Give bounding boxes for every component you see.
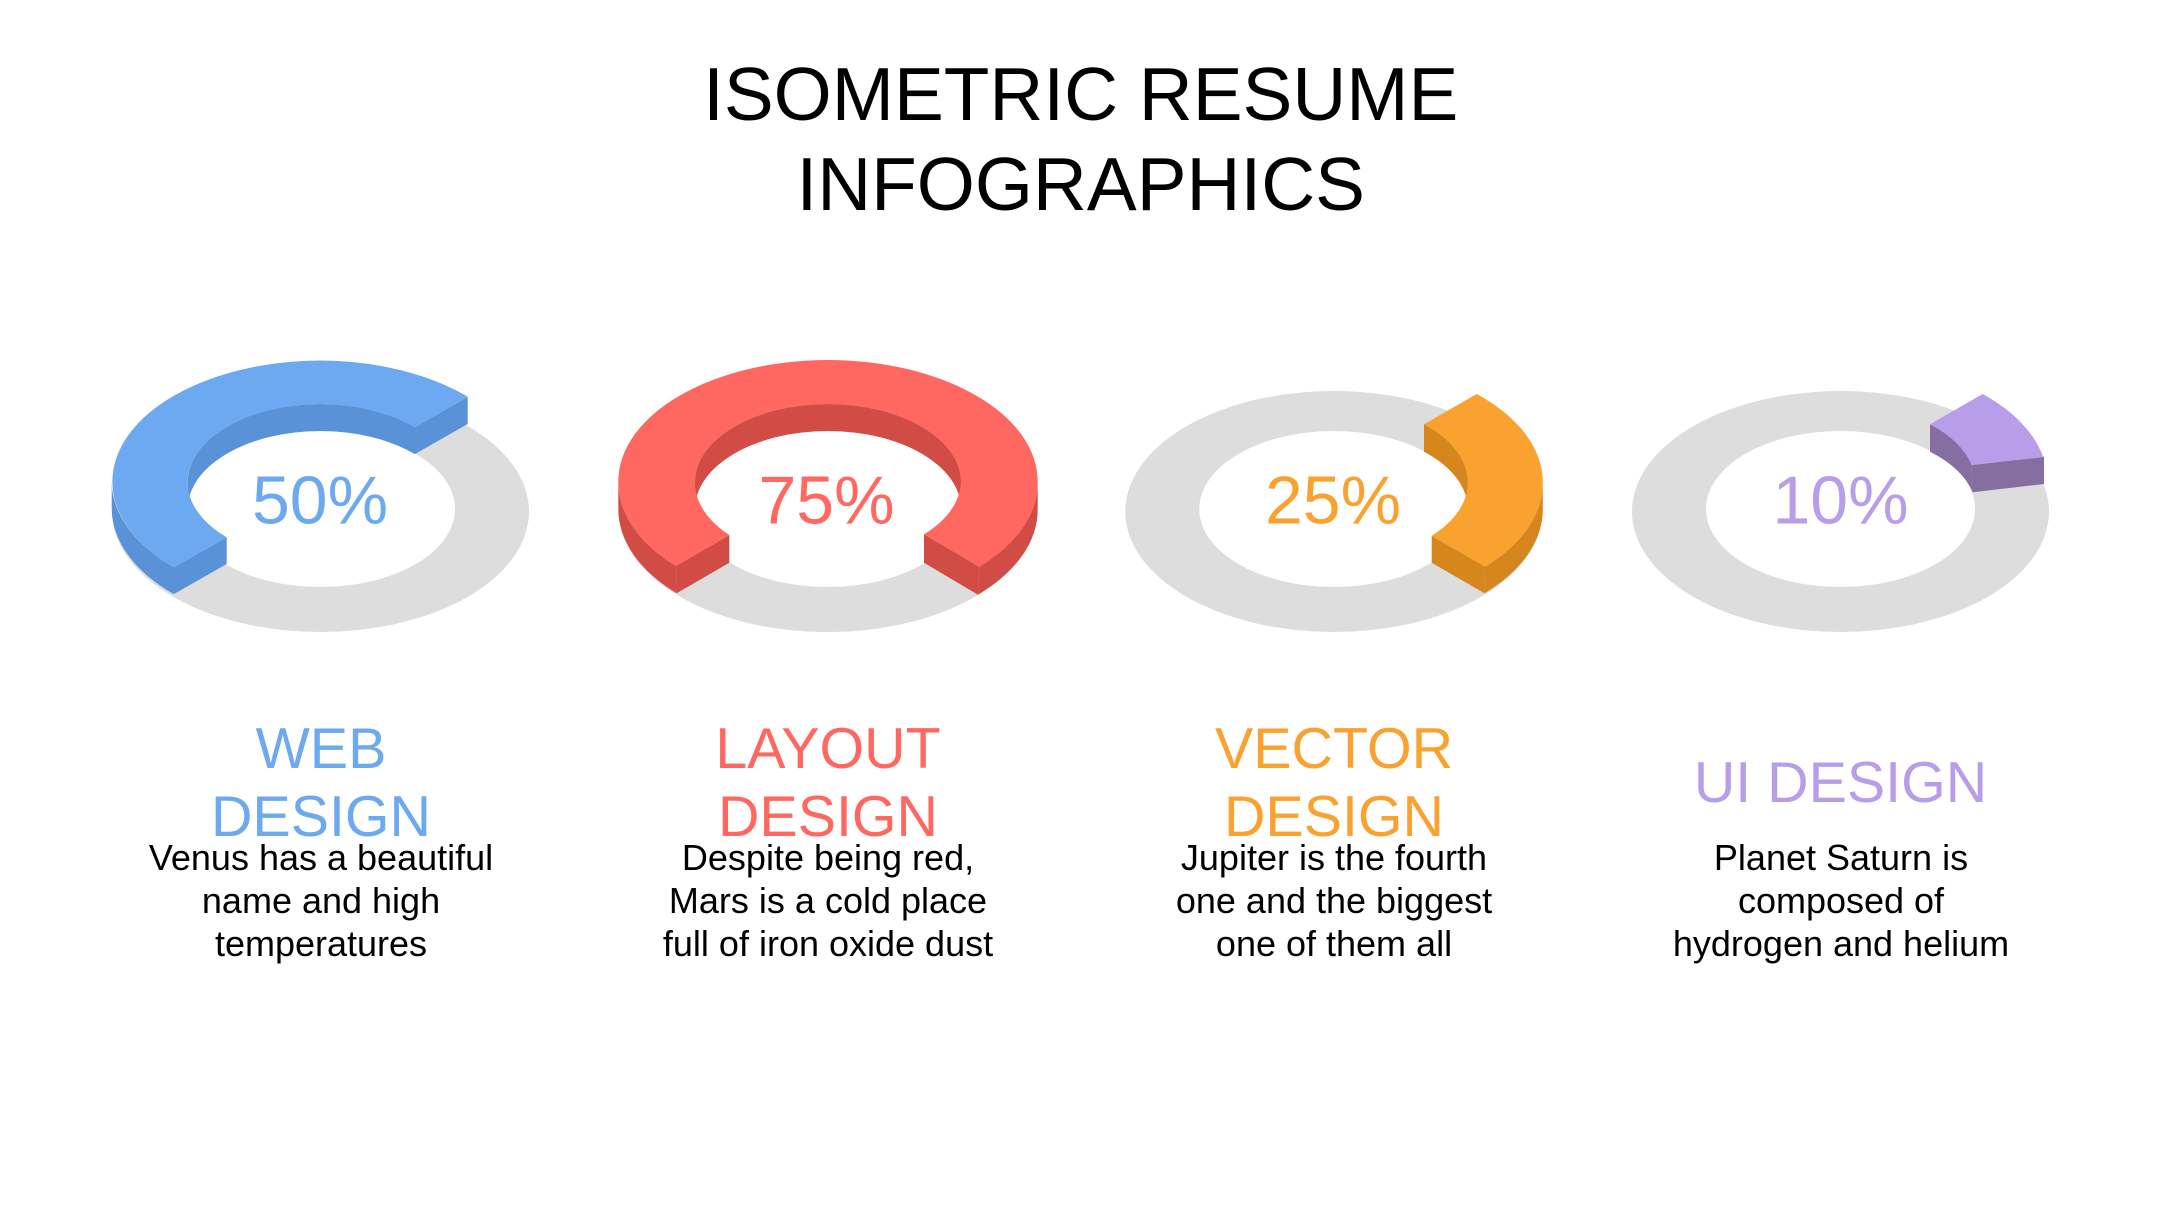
description: web design: Venus has a beautiful (149, 837, 493, 878)
description: layout design: Despite being red, (682, 837, 974, 878)
percentage: 50%: 50% (252, 462, 388, 538)
description: vector design: one of them all (1216, 923, 1452, 964)
description: ui design (1673, 837, 2009, 964)
description: vector design (1176, 837, 1492, 964)
percentage: 75%: 75% (758, 462, 895, 538)
label: layout design (715, 717, 941, 849)
label: ui design: UI DESIGN (1694, 751, 1987, 815)
donut chart: 25% (1125, 391, 1543, 632)
label: layout design: DESIGN (718, 785, 938, 849)
panel: web design (112, 360, 529, 964)
label: web design: WEB (256, 717, 386, 781)
description: vector design: Jupiter is the fourth (1181, 837, 1487, 878)
title (703, 52, 1458, 226)
description: vector design: one and the biggest (1176, 880, 1492, 921)
percentage: 10%: 10% (1772, 462, 1909, 538)
description: layout design (663, 837, 993, 964)
description: ui design: hydrogen and helium (1673, 923, 2009, 964)
label: web design: DESIGN (211, 785, 431, 849)
description: web design: name and high (202, 880, 440, 921)
panel: ui design (1632, 391, 2049, 964)
title: INFOGRAPHICS (796, 142, 1365, 226)
donut chart: 50% (112, 360, 529, 632)
label: layout design: LAYOUT (715, 717, 941, 781)
label: web design (211, 717, 431, 849)
panel: vector design (1125, 391, 1543, 964)
label: vector design: DESIGN (1224, 785, 1444, 849)
description: layout design: Mars is a cold place (669, 880, 987, 921)
donut chart: 10% (1632, 391, 2049, 632)
label: vector design (1215, 717, 1453, 849)
percentage: 25%: 25% (1265, 462, 1401, 538)
description: ui design: Planet Saturn is (1714, 837, 1968, 878)
title: ISOMETRIC RESUME (703, 52, 1458, 136)
description: layout design: full of iron oxide dust (663, 923, 993, 964)
panel: layout design (618, 360, 1038, 964)
description: web design (149, 837, 493, 964)
label: vector design: VECTOR (1215, 717, 1453, 781)
donut chart: 75% (618, 360, 1038, 632)
description: web design: temperatures (215, 923, 427, 964)
description: ui design: composed of (1738, 880, 1945, 921)
